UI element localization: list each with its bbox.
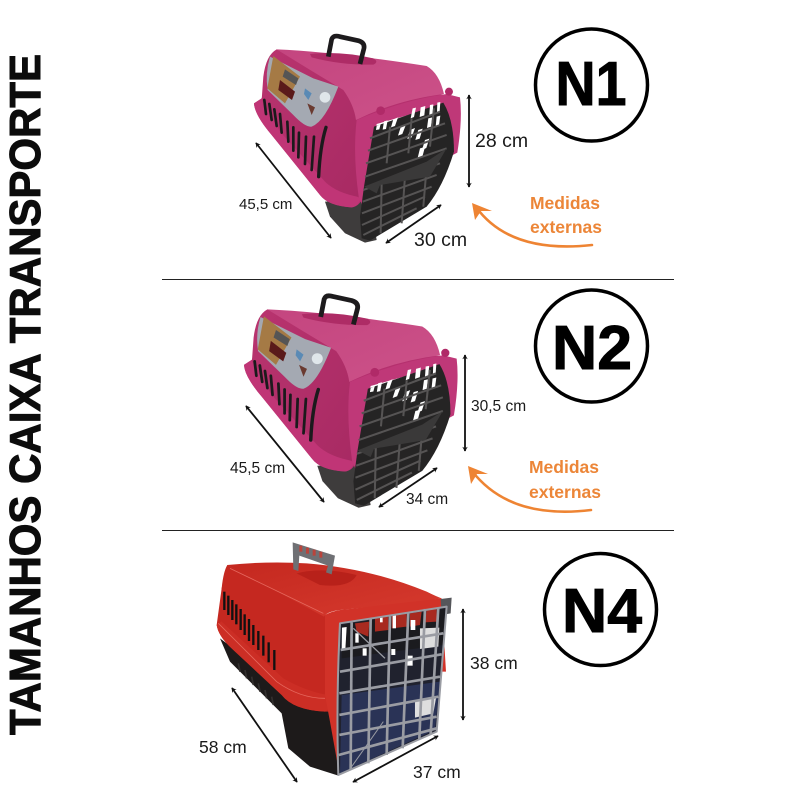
dimension: length 45,5 cm: 45,5 cm (230, 460, 285, 477)
dimension: height 28 cm (469, 95, 528, 187)
callout: Medidas externas: Medidas (529, 457, 599, 477)
badge: N2 (536, 290, 648, 402)
badge: N2: N2 (552, 314, 632, 383)
dimension: length 58 cm: 58 cm (199, 737, 247, 757)
dimension: length 45,5 cm (239, 143, 331, 238)
callout: Medidas externas (468, 457, 601, 512)
dimension: width 37 cm (353, 736, 461, 782)
badge: N4 (544, 554, 656, 666)
callout: Medidas externas: externas (530, 217, 602, 237)
panel: N1 carrier (239, 29, 648, 251)
badge: N4: N4 (562, 577, 643, 646)
callout: Medidas externas: externas (529, 482, 601, 502)
illustration: pink carrier N1 (254, 36, 461, 243)
illustration: red carrier N4 (217, 542, 452, 776)
badge: N1 (536, 29, 648, 141)
title: TAMANHOS CAIXA TRANSPORTE (1, 54, 50, 735)
dimension: width 34 cm (379, 468, 448, 508)
callout: Medidas externas (472, 193, 602, 246)
dimension: height 28 cm: 28 cm (475, 130, 528, 152)
dimension: width 30 cm: 30 cm (414, 229, 467, 251)
badge: N1: N1 (556, 50, 626, 119)
dimension: width 34 cm: 34 cm (406, 491, 448, 508)
dimension: length 45,5 cm (230, 406, 324, 502)
dimension: length 45,5 cm: 45,5 cm (239, 196, 292, 213)
panel: N2 carrier (230, 290, 648, 512)
dimension: height 30,5 cm: 30,5 cm (471, 398, 526, 415)
divider lines (162, 280, 674, 530)
dimension: width 30 cm (386, 205, 467, 251)
dimension: height 38 cm: 38 cm (470, 653, 518, 673)
dimension: height 30,5 cm (465, 355, 526, 451)
dimension: width 37 cm: 37 cm (413, 762, 461, 782)
illustration: pink carrier N2 (244, 296, 458, 508)
panel: N4 carrier (199, 542, 656, 782)
callout: Medidas externas: Medidas (530, 193, 600, 213)
dimension: length 58 cm (199, 688, 297, 782)
dimension: height 38 cm (463, 609, 518, 720)
